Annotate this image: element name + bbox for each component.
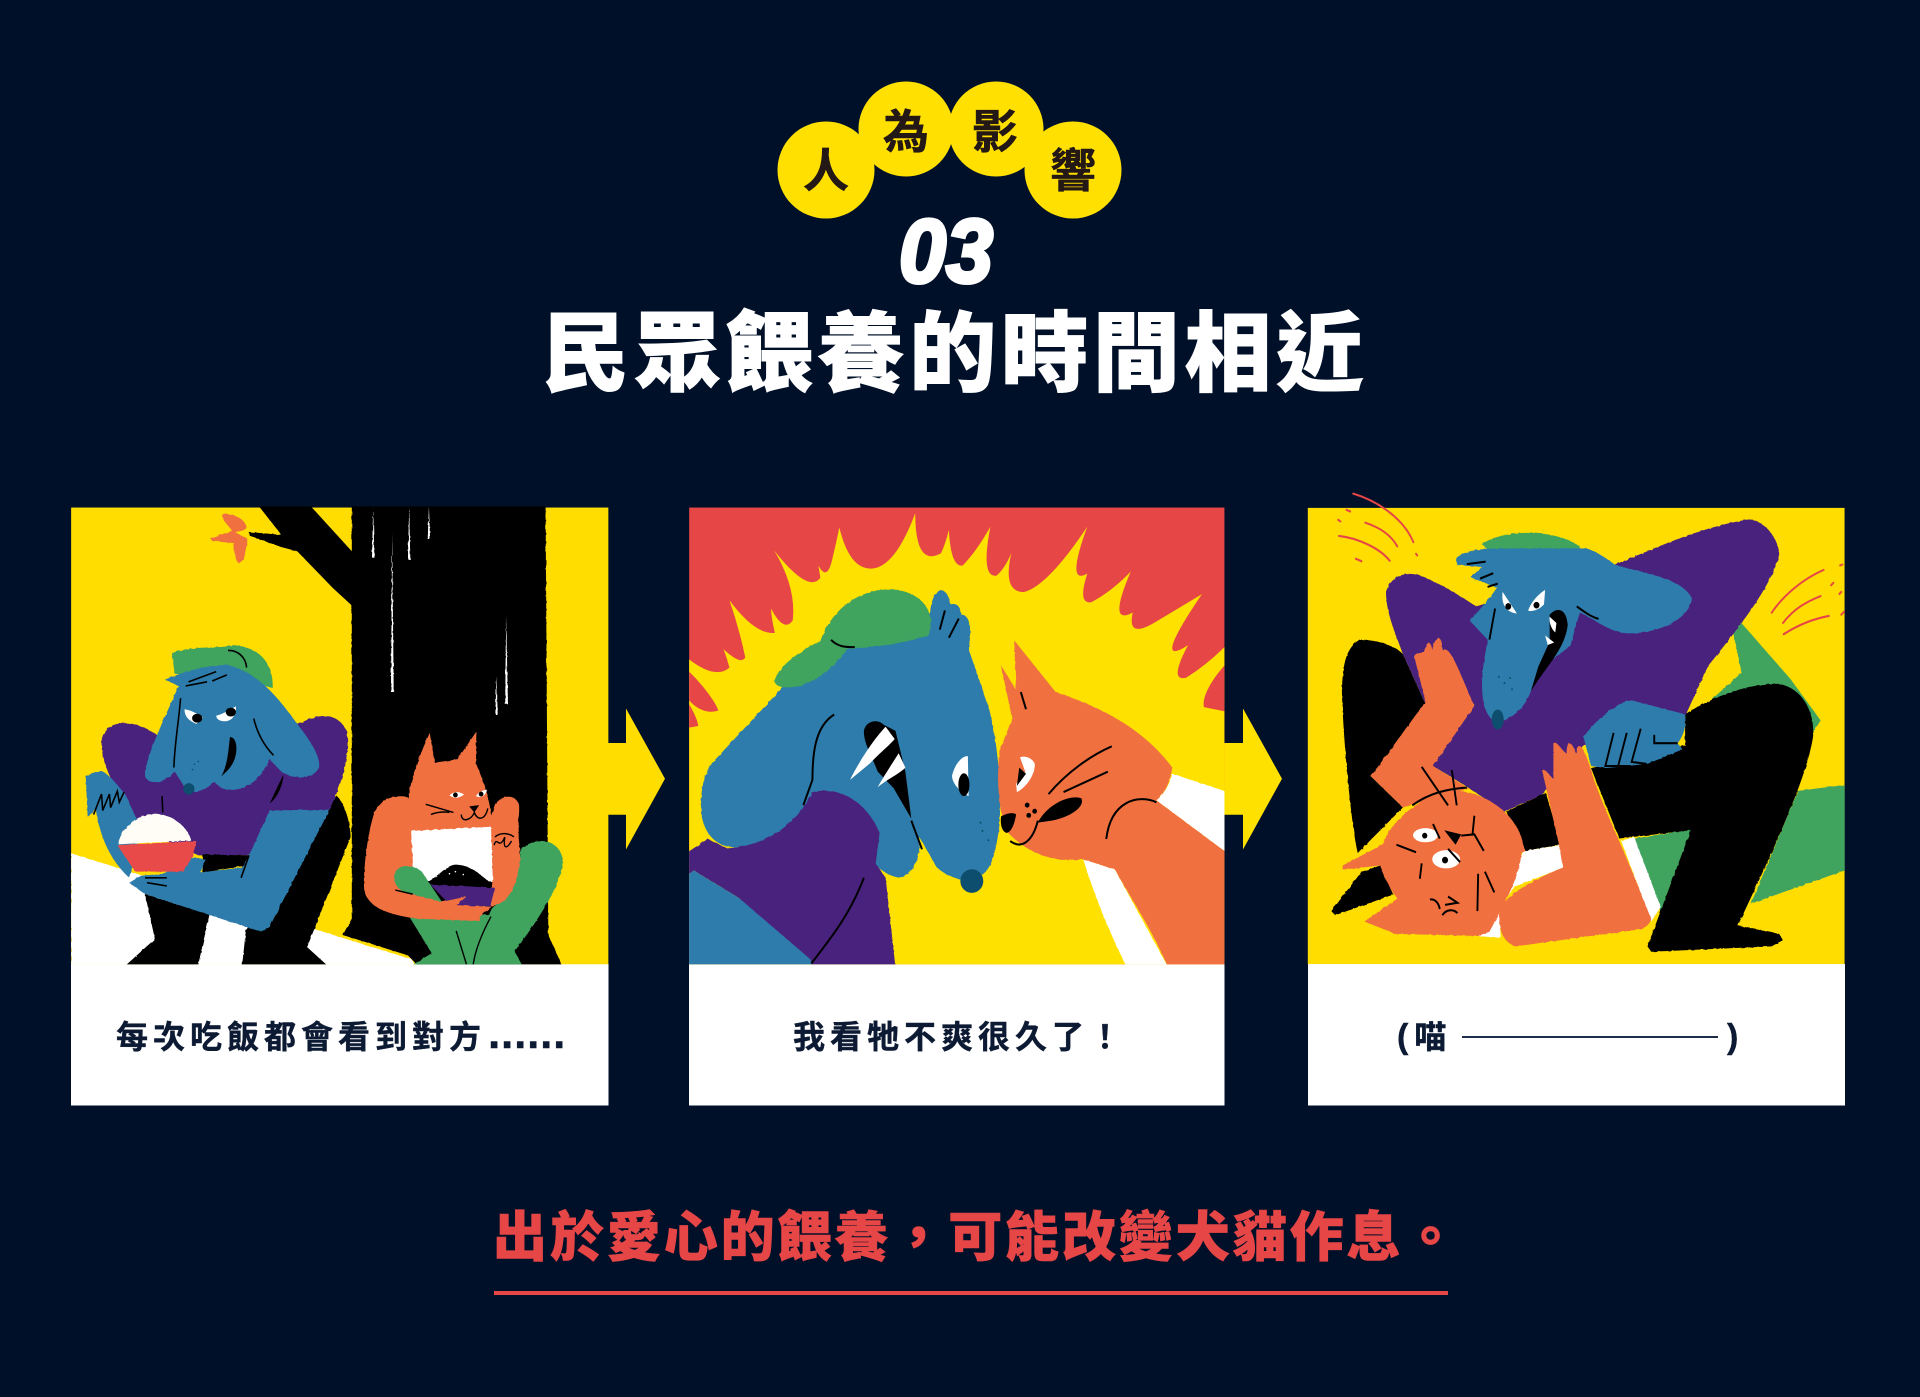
caption 3 closing parenthesis: ) [1727,1018,1738,1056]
conclusion text: 出於愛心的餵養，可能改變犬貓作息。 [493,1207,1460,1268]
conclusion underline [494,1291,1448,1295]
header badge: 人為影響 [778,82,1122,218]
arrow: panel 2 to panel 3 [1222,708,1282,850]
caption 1 text: 每次吃飯都會看到對方...... [116,1009,566,1058]
caption card 3 [1308,964,1845,1106]
caption 3 long dash [1462,1036,1718,1038]
header badge: 人為影響: 為 [883,106,929,158]
illustration 2: dog and cat face off [686,508,1228,968]
section number 03: 03 [899,202,993,302]
illustration 3: dog pins cat [1308,494,1847,964]
caption 2 text: 我看牠不爽很久了！ [793,1019,1126,1055]
panel 1: eating at the same time [71,502,608,1106]
panel 2: conflict between dog and cat [686,508,1228,1106]
illustration 1: dog and cat eating under a tree [71,502,608,968]
title: 民眾餵養的時間相近 [542,306,1368,403]
caption card 2 [689,964,1224,1106]
caption card 1 [71,964,608,1106]
header badge: 人為影響: 響 [1050,145,1096,197]
header badge: 人為影響: 人 [803,145,849,197]
arrow: panel 1 to panel 2 [606,708,665,850]
caption 3 text: (喵 [1397,1018,1446,1056]
panel 3: dog and cat fighting [1308,494,1847,1106]
header badge: 人為影響: 影 [972,106,1018,158]
